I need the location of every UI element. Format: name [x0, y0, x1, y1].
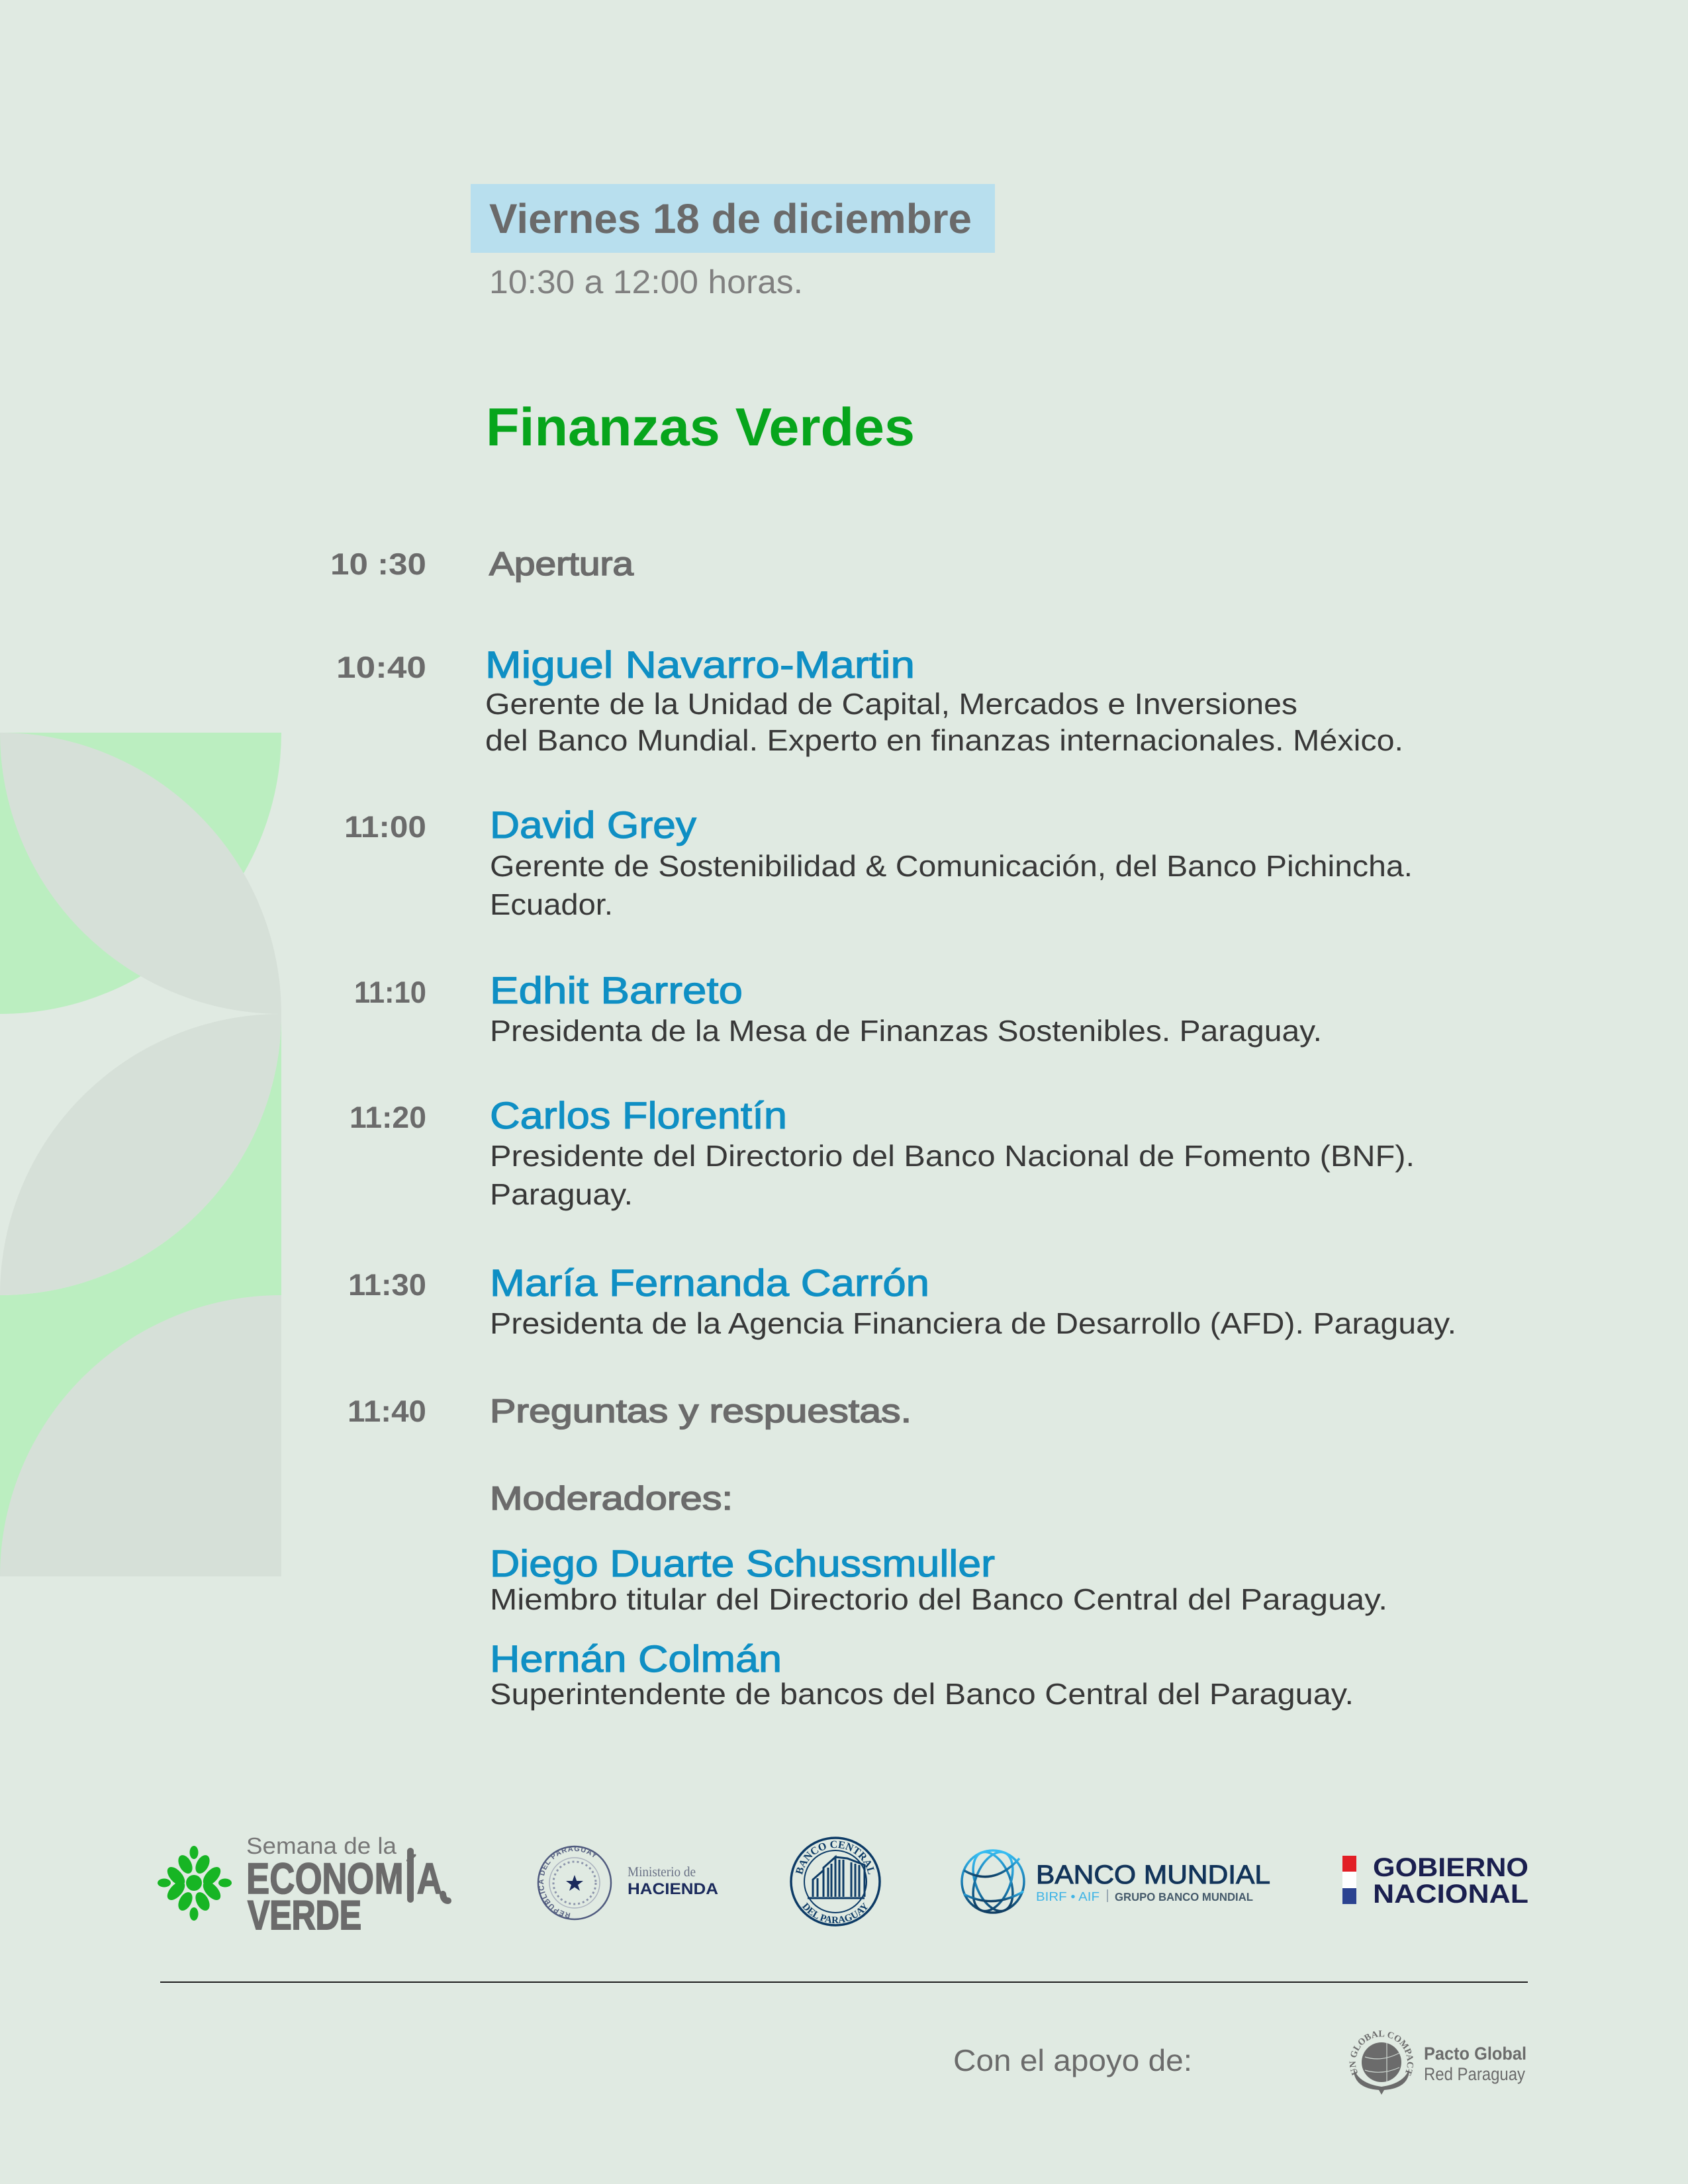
agenda item: Miguel Navarro-Martin: [336, 644, 1403, 757]
logo: Banco Mundial: [962, 1846, 1270, 1917]
moderator: Diego Duarte Schussmuller: Diego Duarte Schussmuller: [490, 1543, 995, 1585]
agenda item: Edhit Barreto: 11:10: [354, 975, 426, 1009]
logo: Semana de la Economía Verde: ECONOMÍA: [246, 1854, 442, 1903]
agenda item: David Grey: 11:00: [344, 809, 426, 844]
logo: Banco Mundial: BIRF • AIF: [1036, 1890, 1100, 1904]
logo: Semana de la Economía Verde: [158, 1833, 448, 1938]
logo: Semana de la Economía Verde: VERDE: [248, 1893, 361, 1938]
agenda item: preguntas y respuestas: 11:40: [348, 1394, 426, 1428]
icon: globe: [962, 1846, 1024, 1917]
agenda item: preguntas y respuestas: [348, 1392, 912, 1430]
agenda item: María Fernanda Carrón: 11:30: [348, 1267, 426, 1302]
date banner: Viernes 18 de diciembre: [489, 196, 972, 242]
agenda item: Carlos Florentín: 11:20: [350, 1100, 426, 1134]
icon: national seal: REPÚBLICA DEL PARAGUAY: [539, 1847, 596, 1918]
icon: green leaf flower: [158, 1846, 232, 1921]
agenda item: apertura: Apertura: [489, 545, 633, 582]
icon: UN Global Compact globe: [1349, 2030, 1413, 2095]
logo: Ministerio de Hacienda: Ministerio de: [628, 1864, 696, 1880]
agenda item: David Grey: David Grey: [490, 804, 697, 846]
agenda item: preguntas y respuestas: Preguntas y respuestas.: [490, 1392, 912, 1430]
agenda item: Carlos Florentín: [350, 1095, 1415, 1211]
logo: Ministerio de Hacienda: HACIENDA: [628, 1880, 718, 1898]
agenda item: David Grey: Ecuador.: [490, 887, 613, 921]
agenda item: David Grey: Gerente de Sostenibilidad & Comunicación, del Banco Pichincha.: [490, 849, 1413, 883]
logo: Gobierno Nacional: [1342, 1853, 1528, 1909]
moderator: Hernán Colmán: Superintendente de bancos del Banco Central del Paraguay.: [490, 1677, 1354, 1711]
agenda item: David Grey: [344, 804, 1413, 921]
agenda item: Miguel Navarro-Martin: Miguel Navarro-Martin: [485, 644, 915, 686]
agenda item: María Fernanda Carrón: María Fernanda Carrón: [490, 1262, 929, 1304]
logo: Semana de la Economía Verde: Semana de la: [246, 1833, 397, 1859]
moderator: Hernán Colmán: Hernán Colmán: [490, 1638, 782, 1680]
moderators heading: Moderadores:: [490, 1480, 733, 1517]
agenda item: Carlos Florentín: Paraguay.: [490, 1177, 633, 1211]
title: Finanzas Verdes: [486, 398, 915, 457]
agenda item: Miguel Navarro-Martin: Gerente de la Unidad de Capital, Mercados e Inversiones: [485, 687, 1297, 721]
logo: Pacto Global: [1349, 2030, 1526, 2095]
support label: Con el apoyo de:: [953, 2043, 1192, 2077]
icon: UN Global Compact globe: UN GLOBAL COMPACT: [1349, 2030, 1413, 2075]
divider line: [160, 1981, 1528, 1983]
icon: flag: [1342, 1856, 1356, 1904]
event hours: 10:30 a 12:00 horas.: [489, 263, 803, 300]
moderator: Diego Duarte Schussmuller: [490, 1543, 1387, 1616]
agenda item: María Fernanda Carrón: [348, 1262, 1456, 1340]
logo: Banco Central del Paraguay: BANCO CENTRAL: [796, 1841, 874, 1875]
icon: bank building: [808, 1857, 865, 1898]
logo: Gobierno Nacional: NACIONAL: [1373, 1880, 1528, 1909]
logo: Pacto Global: Pacto Global: [1424, 2044, 1526, 2064]
date banner: [471, 184, 995, 253]
agenda item: Edhit Barreto: Presidenta de la Mesa de Finanzas Sostenibles. Paraguay.: [490, 1014, 1322, 1048]
logo: Banco Central del Paraguay: [790, 1837, 881, 1927]
logo: Gobierno Nacional: GOBIERNO: [1373, 1853, 1528, 1882]
agenda item: Edhit Barreto: Edhit Barreto: [490, 970, 743, 1012]
moderator: Diego Duarte Schussmuller: Miembro titular del Directorio del Banco Central del Paraguay.: [490, 1582, 1387, 1616]
agenda item: Carlos Florentín: Carlos Florentín: [490, 1095, 787, 1137]
agenda item: María Fernanda Carrón: Presidenta de la Agencia Financiera de Desarrollo (AFD). Paraguay.: [490, 1306, 1456, 1340]
agenda item: apertura: 10 :30: [330, 547, 426, 581]
agenda item: Miguel Navarro-Martin: del Banco Mundial. Experto en finanzas internacionales. México.: [485, 723, 1403, 757]
logo: Banco Central del Paraguay: DEL PARAGUAY: [802, 1902, 868, 1923]
logo: Banco Mundial: GRUPO BANCO MUNDIAL: [1115, 1891, 1253, 1903]
decorative leaf pattern: [0, 733, 281, 1576]
logo: Banco Mundial: BANCO MUNDIAL: [1036, 1860, 1270, 1889]
agenda item: Carlos Florentín: Presidente del Directorio del Banco Nacional de Fomento (BNF).: [490, 1139, 1415, 1173]
logo: Ministerio de Hacienda: [538, 1845, 718, 1921]
logo: Pacto Global: Red Paraguay: [1424, 2064, 1525, 2084]
agenda item: Miguel Navarro-Martin: 10:40: [336, 650, 426, 684]
agenda item: apertura: [330, 545, 633, 582]
agenda item: Edhit Barreto: [354, 970, 1322, 1048]
moderator: Hernán Colmán: [490, 1638, 1354, 1711]
